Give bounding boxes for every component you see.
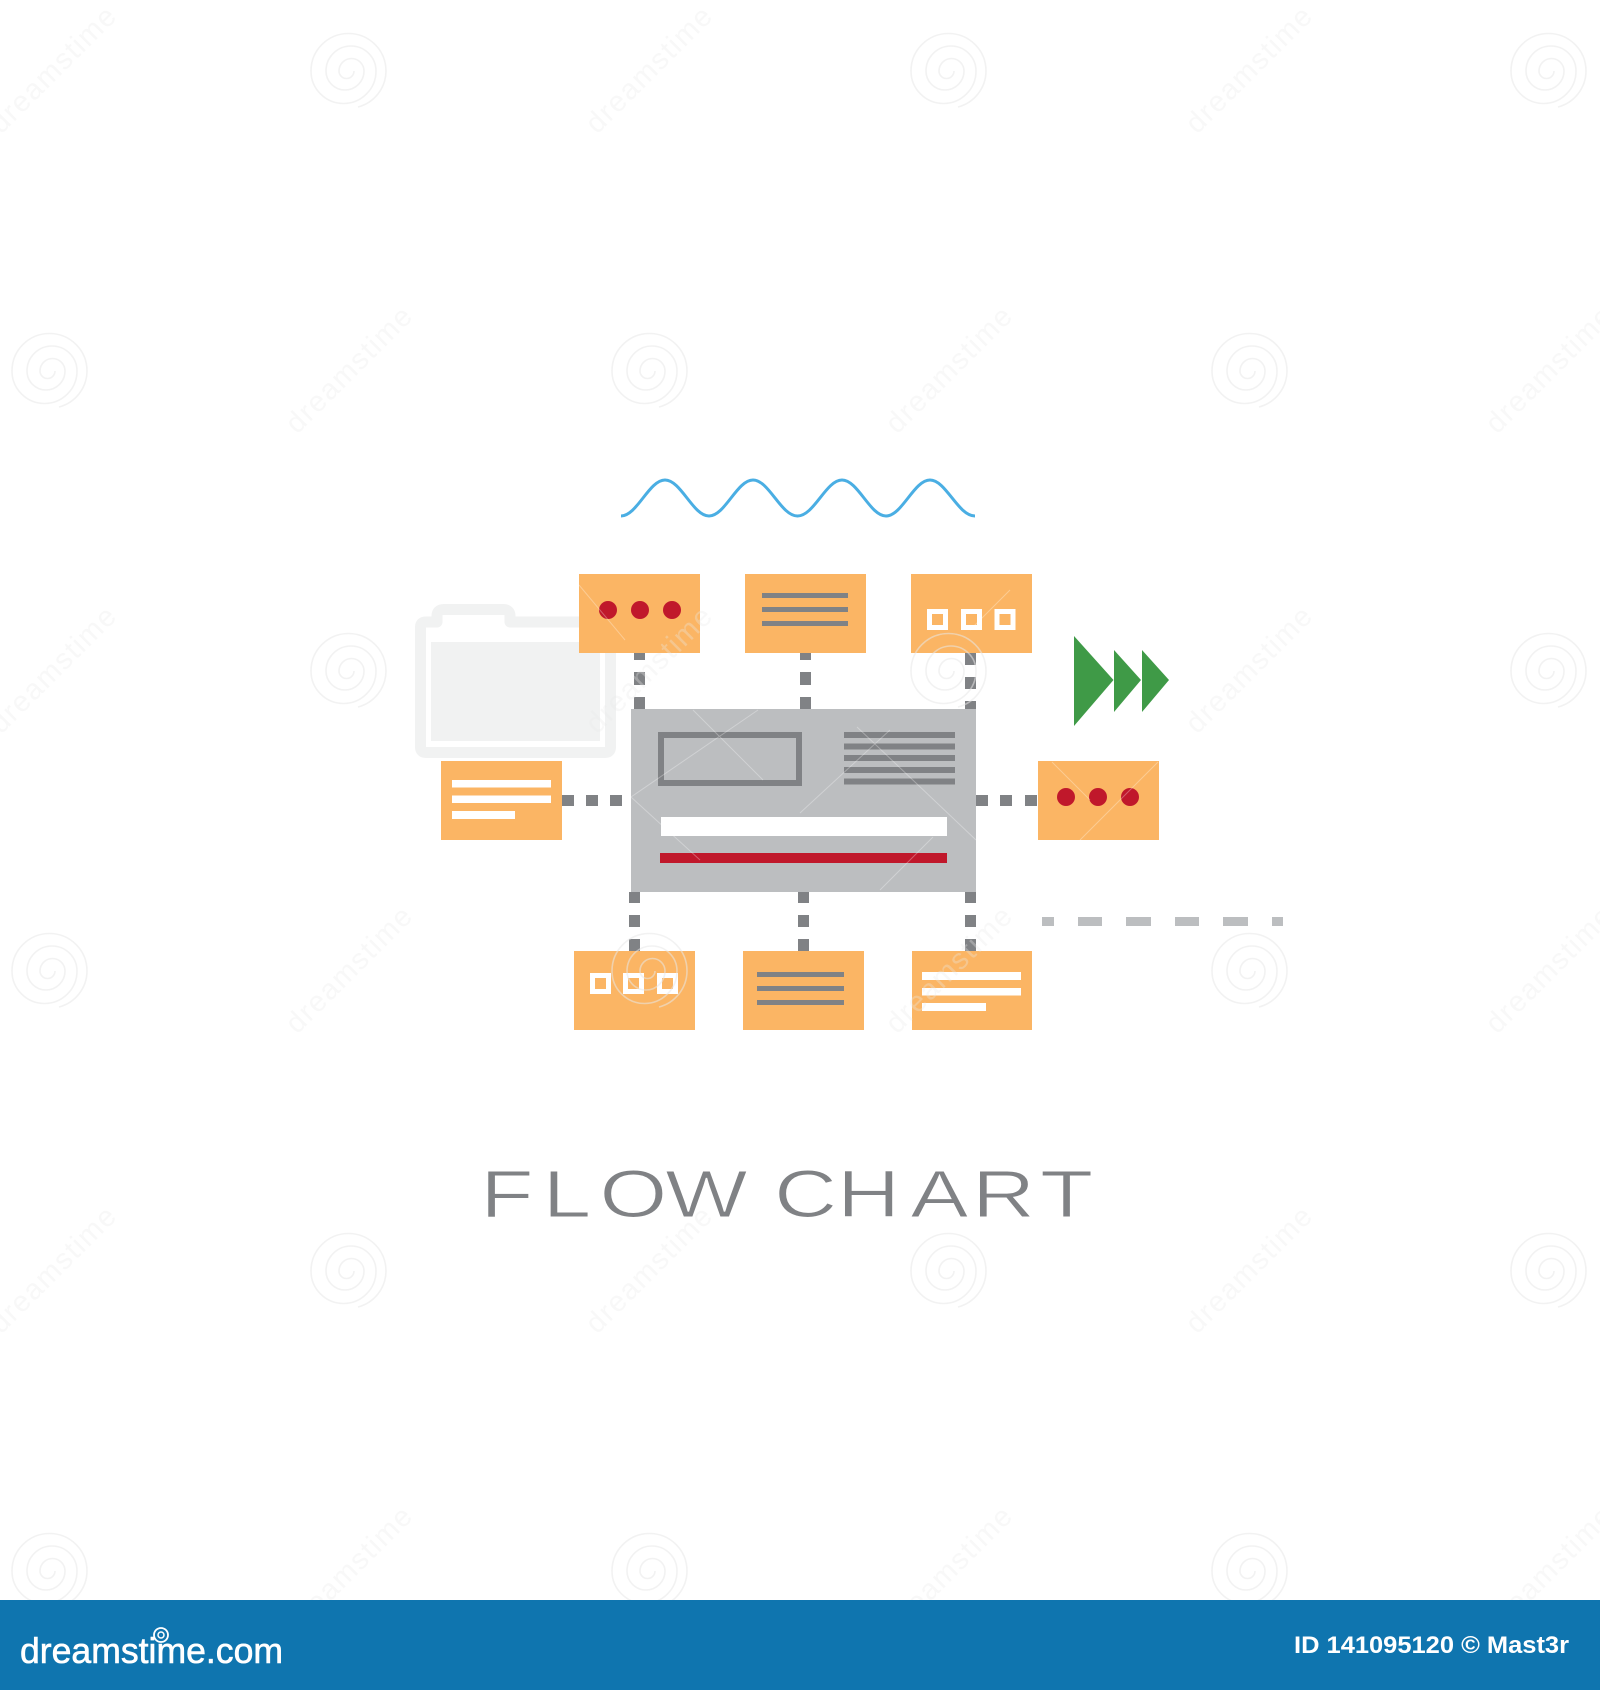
- panel text lines: [844, 732, 955, 784]
- footer bar: [0, 1600, 1600, 1690]
- panel image frame: [661, 735, 799, 783]
- watermark layer: dreamstime: [879, 899, 1020, 1040]
- left box: white lines: [441, 761, 562, 840]
- connectors: bottom: [629, 892, 976, 951]
- panel red bar: [660, 853, 947, 863]
- watermark layer: dreamstime: [879, 1499, 1020, 1640]
- footer credit: ID 141095120 © Mast3r: [1294, 1632, 1569, 1659]
- bottom box 3: white lines: [912, 951, 1032, 1030]
- right box: red dots: [1038, 761, 1159, 840]
- watermark layer: dreamstime: [1179, 1199, 1320, 1340]
- folder icon: [420, 610, 610, 752]
- green triple arrow: [1074, 636, 1169, 726]
- top box 2: grey lines: [745, 574, 866, 653]
- panel white bar: [661, 817, 947, 836]
- watermark layer: dreamstime: [879, 299, 1020, 440]
- watermark layer: dreamstime: [1179, 599, 1320, 740]
- watermark layer: dreamstime: [279, 299, 420, 440]
- dashed grey line: [1042, 917, 1283, 926]
- top box 3: white squares: [911, 574, 1032, 653]
- footer logo: dreamstime.com: [20, 1630, 283, 1671]
- watermark layer: dreamstime: [279, 1499, 420, 1640]
- watermark layer: dreamstime: [279, 899, 420, 1040]
- top box 1: red dots: [579, 574, 700, 653]
- bottom box 1: white squares: [574, 951, 695, 1030]
- title: FLOW CHART: [480, 1158, 1093, 1232]
- connectors: top: [634, 653, 976, 709]
- watermark layer: dreamstime: [579, 0, 720, 140]
- watermark layer: dreamstime: [579, 1199, 720, 1340]
- connectors: left and right: [562, 795, 1037, 806]
- watermark layer: dreamstime: [1179, 0, 1320, 140]
- bottom box 2: grey lines: [743, 951, 864, 1030]
- central panel: [631, 709, 976, 892]
- watermark layer: dreamstime: [579, 599, 720, 740]
- wave line: [621, 480, 975, 516]
